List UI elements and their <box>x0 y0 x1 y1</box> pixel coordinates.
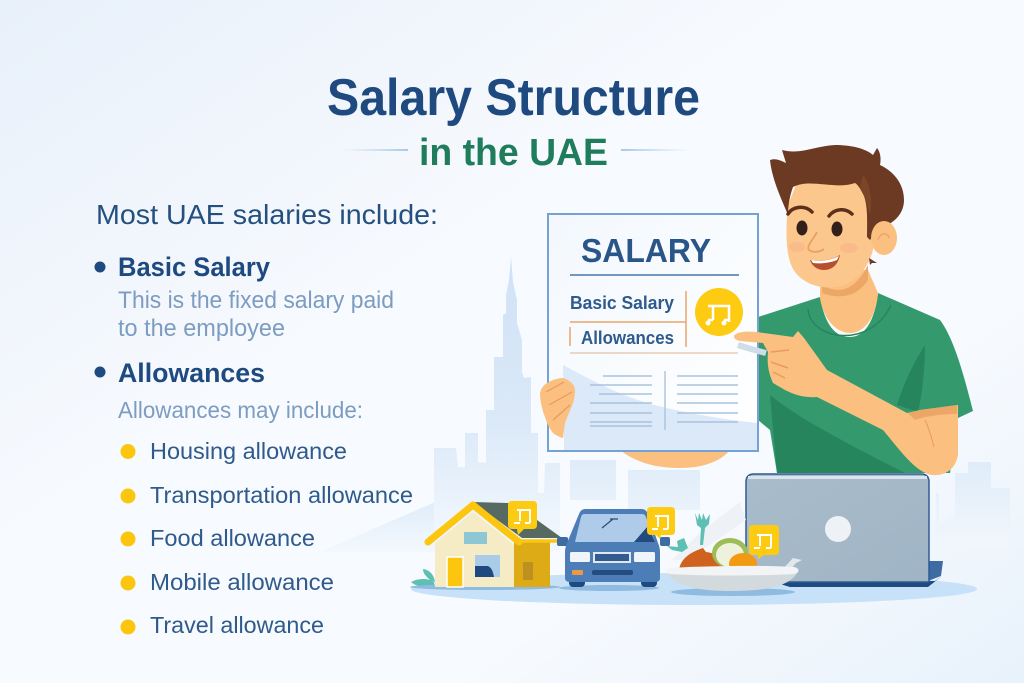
food plate with badge <box>666 502 802 596</box>
paper fold <box>563 365 757 450</box>
allowance list <box>120 438 413 638</box>
subtitle with side rules: in the UAE <box>419 132 608 174</box>
section: allowances: Allowances <box>118 358 265 388</box>
leaves <box>667 538 688 552</box>
laptop <box>746 474 943 587</box>
document text lines <box>590 371 738 430</box>
car with badge <box>557 507 675 591</box>
shirt <box>758 293 973 473</box>
section: allowances: Allowances may include: <box>118 397 363 423</box>
allowance list: Mobile allowance <box>150 569 334 595</box>
document title: SALARY <box>581 232 711 269</box>
salary document <box>548 214 758 451</box>
eyes <box>796 220 808 236</box>
skyline backdrop <box>320 257 1010 552</box>
intro text: Most UAE salaries include: <box>96 199 438 230</box>
coin badge <box>695 288 743 336</box>
mouth <box>810 255 840 270</box>
allowance list: Travel allowance <box>150 612 324 638</box>
fork <box>695 513 710 545</box>
leaf <box>411 569 435 587</box>
ear <box>871 221 897 255</box>
neck <box>820 270 878 333</box>
badge <box>508 501 537 535</box>
document row: allowances: Allowances <box>581 328 674 348</box>
document row: basic salary: Basic Salary <box>570 293 674 313</box>
section: basic salary: This is the fixed salary paid <box>118 287 394 314</box>
ground ellipse <box>411 573 977 605</box>
cheeks <box>789 242 858 253</box>
bowl <box>671 588 795 596</box>
badge <box>749 525 779 559</box>
section: basic salary: to the employee <box>118 315 285 342</box>
face <box>786 175 877 287</box>
pointing arm and hand <box>734 331 958 475</box>
allowance list: Housing allowance <box>150 438 347 464</box>
forearm behind paper <box>620 450 730 468</box>
house with badge <box>410 501 562 590</box>
eyebrows <box>788 207 812 214</box>
hair <box>770 145 904 240</box>
title: Salary Structure <box>327 69 700 127</box>
section: basic salary: Basic Salary <box>118 252 270 282</box>
holding hand <box>540 378 575 438</box>
person <box>620 145 973 473</box>
section: basic salary <box>94 252 394 342</box>
nose <box>808 232 824 252</box>
napkin <box>672 502 746 560</box>
section: allowances <box>94 358 363 423</box>
badge <box>647 507 675 539</box>
allowance list: Food allowance <box>150 525 315 551</box>
spoon <box>782 558 802 570</box>
allowance list: Transportation allowance <box>150 482 413 508</box>
food <box>679 548 729 570</box>
